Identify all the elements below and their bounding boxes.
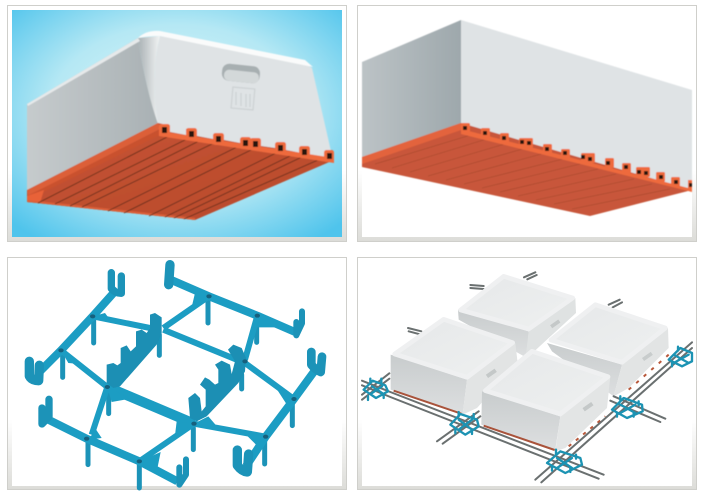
illustration: tapered foam block with terracotta base <box>27 31 334 220</box>
panel: four blocks assembled on rebar grid <box>358 258 696 490</box>
back block <box>458 276 576 360</box>
terracotta bottom <box>362 123 692 216</box>
panel: blue plastic spacer lattice <box>8 258 346 490</box>
right block <box>547 305 669 396</box>
handle slot <box>221 63 261 84</box>
blue sky background <box>12 10 342 237</box>
centre walls with hooks <box>107 313 246 421</box>
front block <box>481 351 610 451</box>
illustration: spacer lattice <box>29 265 322 488</box>
spacer clusters <box>364 347 692 473</box>
terracotta bottom <box>27 123 334 220</box>
rebar stubs behind blocks <box>408 272 622 335</box>
rebar channels <box>159 124 334 163</box>
embossed logo <box>231 87 255 110</box>
rebar grid foreground <box>362 342 692 482</box>
corner fillets <box>61 293 294 469</box>
illustration: block assembly <box>362 272 692 482</box>
struts <box>37 279 317 481</box>
pegs <box>63 300 292 488</box>
outer slotted clips <box>29 265 322 485</box>
left block <box>391 319 518 415</box>
node holes <box>58 294 297 463</box>
panel: insulated block on blue background <box>8 6 346 242</box>
rebar channels <box>461 123 692 192</box>
panel: plain rectangular block on white background <box>358 6 696 242</box>
illustration: rectangular foam block with terracotta base <box>362 20 692 216</box>
planks <box>38 136 318 219</box>
